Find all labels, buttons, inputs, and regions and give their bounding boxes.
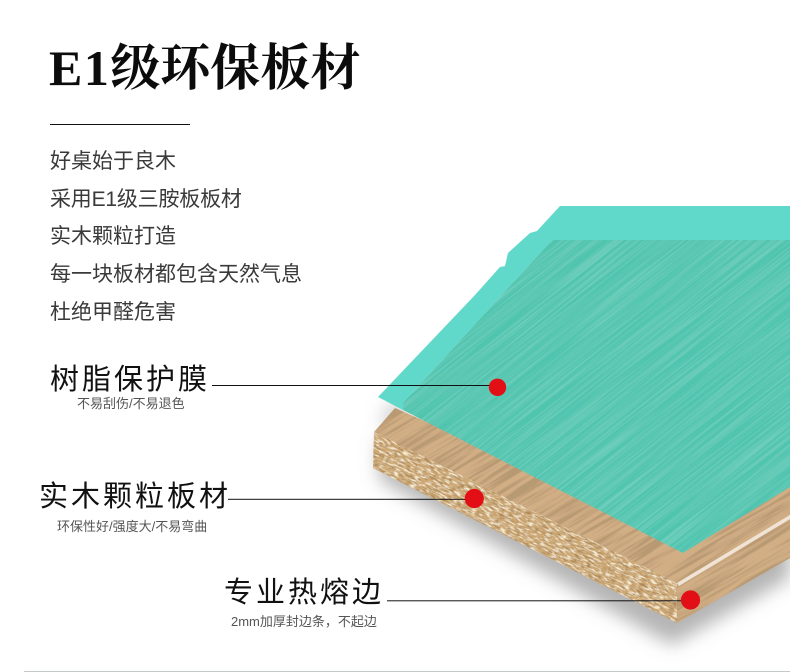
film: translucent resin layer [378, 206, 790, 410]
leader line: resin film [212, 385, 491, 386]
text block: intro [50, 150, 302, 324]
board: particle core side [373, 432, 677, 623]
board: wood top surface [374, 408, 790, 583]
leader line: edge band [387, 600, 685, 601]
film: teal laminated surface [403, 240, 790, 553]
leader line: particle board [228, 499, 470, 500]
label: particle board: 实木颗粒板材 [39, 481, 231, 513]
line 5: 杜绝甲醛危害 [50, 301, 176, 324]
label: resin film: 树脂保护膜 [50, 364, 210, 396]
caption: particle board: 环保性好/强度大/不易弯曲 [57, 519, 207, 534]
title underline [50, 124, 190, 125]
board: heat-sealed edge band [677, 515, 790, 623]
footer rule [24, 671, 790, 672]
line 4: 每一块板材都包含天然气息 [50, 263, 302, 286]
label: edge band: 专业热熔边 [224, 577, 384, 609]
callout dot: resin film [489, 379, 506, 396]
board shadow [378, 396, 790, 645]
callout dot: edge band [681, 590, 700, 610]
line 1: 好桌始于良木 [50, 150, 176, 173]
caption: edge band: 2mm加厚封边条，不起边 [231, 614, 377, 629]
title: E1级环保板材 [49, 40, 360, 96]
line 2: 采用E1级三胺板板材 [50, 188, 242, 211]
line 3: 实木颗粒打造 [50, 225, 176, 248]
caption: resin film: 不易刮伤/不易退色 [77, 396, 185, 411]
callout dot: particle board [465, 489, 484, 508]
